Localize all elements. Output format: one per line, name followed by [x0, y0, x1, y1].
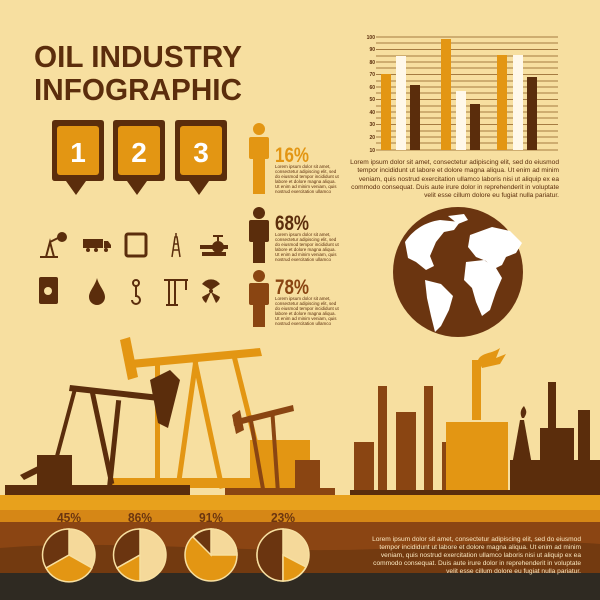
- pie charts: 23%: [271, 510, 295, 525]
- stat 16%: Lorem ipsum dolor sit amet,: [275, 164, 331, 169]
- stat 16%: do eiusmod tempor incididunt ut: [275, 174, 340, 179]
- small pump jack: [225, 405, 335, 495]
- stat 78%: labore et dolore magna aliqua.: [275, 311, 336, 316]
- numbered markers: 1: [70, 137, 86, 168]
- chart description: [350, 159, 559, 199]
- icon: drop: [89, 278, 105, 305]
- stat 78%: consectetur adipiscing elit, sed: [275, 301, 337, 306]
- icon: crane: [164, 279, 188, 305]
- bar chart: 40: [369, 110, 375, 116]
- stat 68%: [249, 207, 340, 263]
- stat 78%: [249, 270, 340, 327]
- stat 78%: Ut enim ad minim veniam, quis: [275, 316, 337, 321]
- globe: [393, 207, 523, 337]
- bar chart: 70: [369, 72, 375, 78]
- chart description: tempor incididunt ut labore et dolore magna aliqua. Ut enim ad minim: [357, 167, 559, 174]
- pie 86%: [114, 529, 166, 581]
- bar chart: 10: [369, 148, 375, 154]
- bottom description: tempor incididunt ut labore et dolore magna aliqua. Ut enim ad minim: [379, 544, 581, 551]
- pie charts: 45%: [57, 510, 81, 525]
- pie charts: 91%: [199, 510, 223, 525]
- title: [34, 39, 242, 107]
- stat 16%: consectetur adipiscing elit, sed: [275, 169, 337, 174]
- title: INFOGRAPHIC: [34, 72, 242, 107]
- stat 78%: Lorem ipsum dolor sit amet,: [275, 296, 331, 301]
- stat 68%: consectetur adipiscing elit, sed: [275, 237, 337, 242]
- stat 68%: Ut enim ad minim veniam, quis: [275, 252, 337, 257]
- stat 16%: nostrud exercitation ullamco: [275, 189, 332, 194]
- bottom description: commodo consequat. Duis aute irure dolor in reprehenderit in voluptate: [373, 560, 581, 567]
- people stats: [249, 123, 340, 327]
- bottom description: velit esse cillum dolore eu fugiat nulla pariatur.: [446, 568, 581, 575]
- icon grid: [39, 233, 228, 305]
- title: OIL INDUSTRY: [34, 39, 242, 74]
- stat 16%: [249, 123, 340, 194]
- stat 68%: nostrud exercitation ullamco: [275, 257, 332, 262]
- bottom description: veniam, quis nostrud exercitation ullamco laboris nisi ut aliquip ex ea: [381, 552, 581, 559]
- chart description: Lorem ipsum dolor sit amet, consectetur adipiscing elit, sed do eiusmod: [350, 159, 559, 166]
- icon: truck: [83, 239, 111, 252]
- stat 16%: labore et dolore magna aliqua.: [275, 179, 336, 184]
- numbered markers: 3: [193, 137, 209, 168]
- bottom description: Lorem ipsum dolor sit amet, consectetur adipiscing elit, sed do eiusmod: [372, 536, 581, 543]
- orange pump jack: [110, 337, 310, 490]
- stat 16%: 16%: [275, 144, 309, 167]
- bar chart: 90: [369, 47, 375, 53]
- pie charts: 86%: [128, 510, 152, 525]
- numbered markers: [52, 120, 227, 195]
- stat 16%: Ut enim ad minim veniam, quis: [275, 184, 337, 189]
- bar chart: 60: [369, 85, 375, 91]
- numbered markers: 2: [131, 137, 147, 168]
- stat 78%: 78%: [275, 276, 309, 299]
- icon: jerrycan: [126, 234, 146, 256]
- bar chart: 100: [367, 35, 375, 41]
- chart description: velit esse cillum dolore eu fugiat nulla pariatur.: [424, 192, 559, 199]
- icon: barrel: [39, 277, 58, 304]
- refinery: [354, 386, 462, 496]
- icon: hook: [132, 280, 140, 304]
- icon: derrick: [172, 233, 180, 257]
- icon: radiation: [202, 279, 220, 303]
- bar chart: 50: [369, 97, 375, 103]
- stat 68%: do eiusmod tempor incididunt ut: [275, 242, 340, 247]
- icon: pump jack: [40, 233, 66, 257]
- stat 68%: 68%: [275, 212, 309, 235]
- bar chart: [367, 35, 558, 154]
- ground bands: [0, 495, 600, 600]
- stat 68%: labore et dolore magna aliqua.: [275, 247, 336, 252]
- stat 68%: Lorem ipsum dolor sit amet,: [275, 232, 331, 237]
- pie 23%: [257, 529, 309, 581]
- bar chart: 80: [369, 60, 375, 66]
- bar chart: 30: [369, 122, 375, 128]
- bar chart: 20: [369, 135, 375, 141]
- icon: pipe valve: [200, 236, 228, 254]
- pie 91%: [185, 529, 237, 581]
- pie 45%: [43, 529, 95, 582]
- bottom description: [372, 536, 581, 575]
- chart description: commodo consequat. Duis aute irure dolor in reprehenderit in voluptate: [351, 184, 559, 191]
- dark pump jack left: [5, 370, 190, 495]
- industrial silhouettes: [5, 337, 600, 498]
- stat 78%: do eiusmod tempor incididunt ut: [275, 306, 340, 311]
- chart description: veniam, quis nostrud exercitation ullamco laboris nisi ut aliquip ex ea: [359, 176, 559, 183]
- stat 78%: nostrud exercitation ullamco: [275, 321, 332, 326]
- pie charts: [43, 510, 309, 582]
